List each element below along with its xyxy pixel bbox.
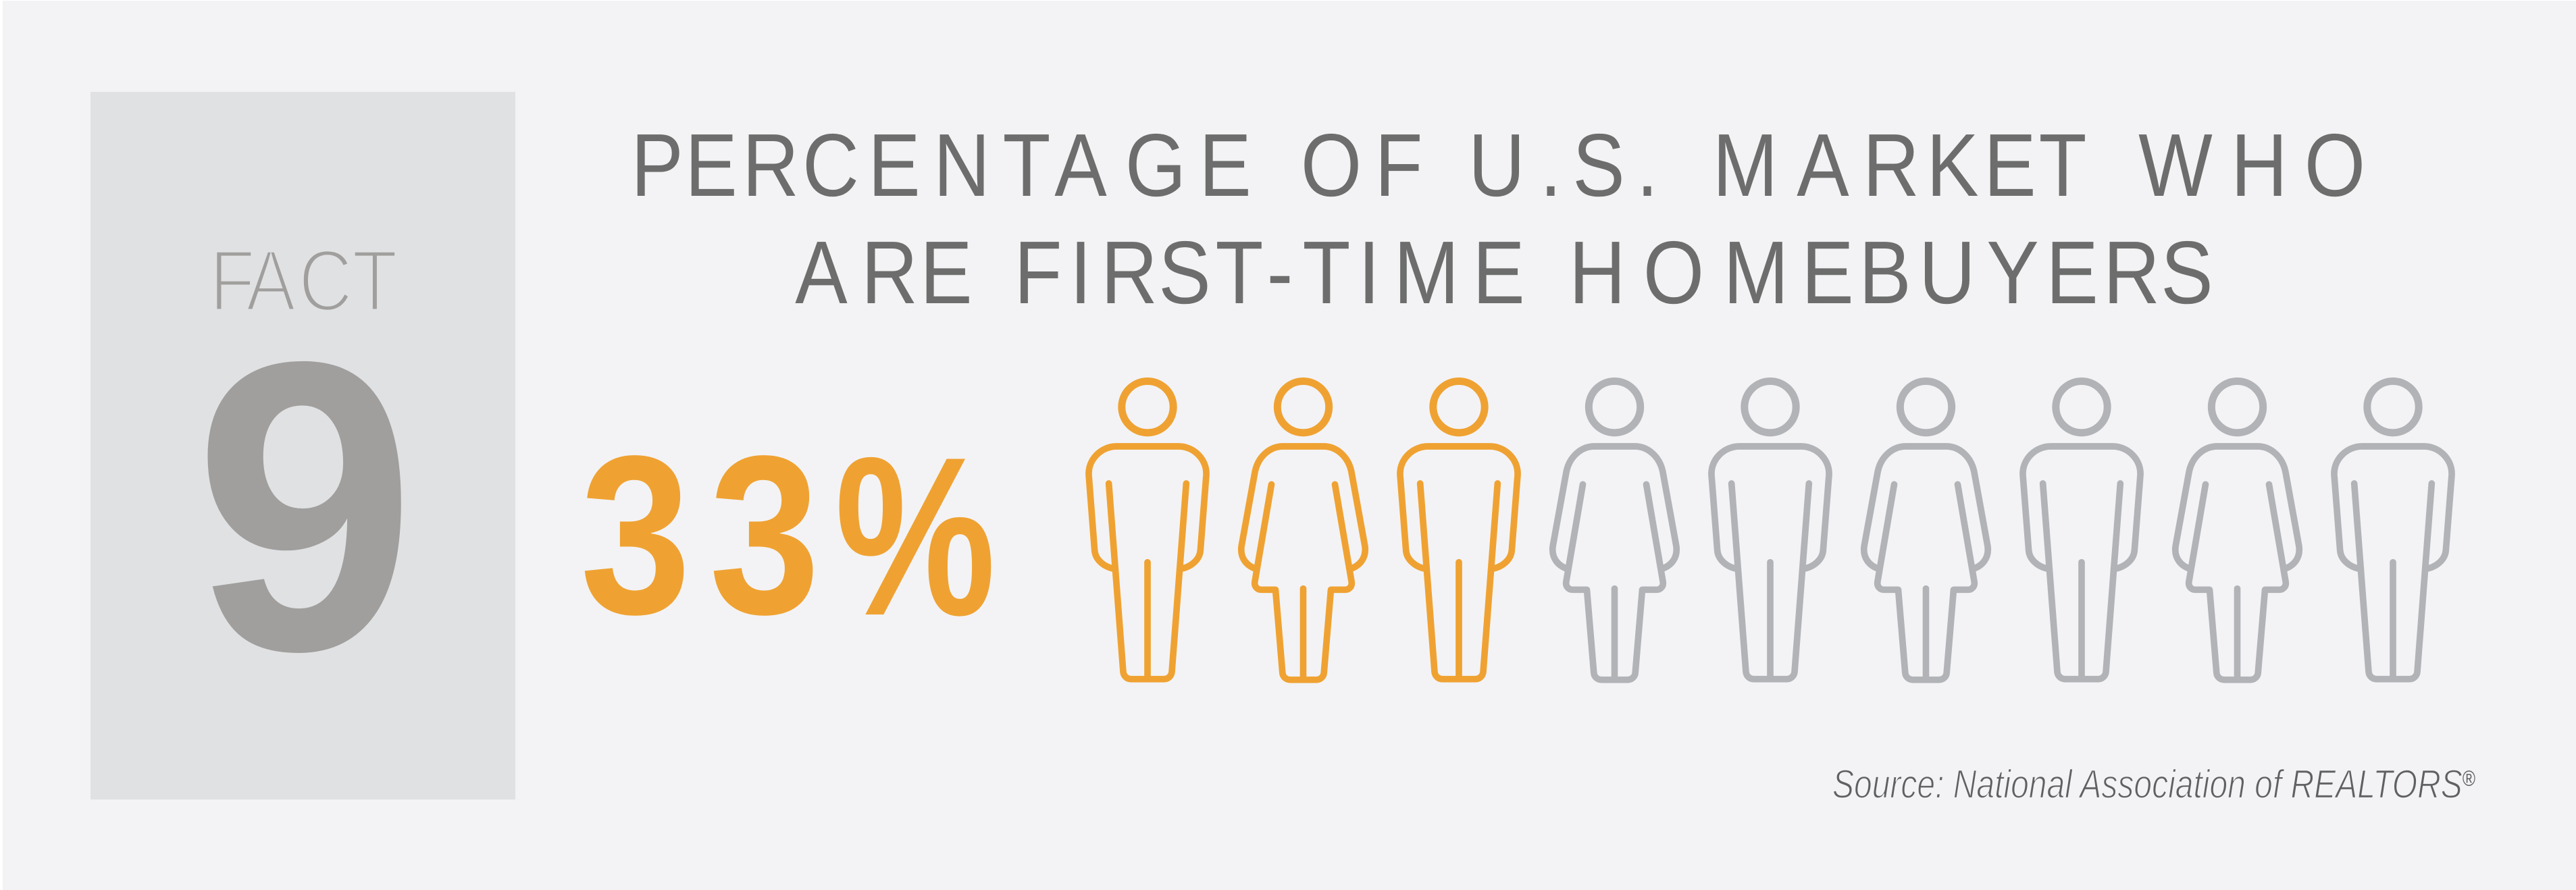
icon: man, grey <box>1711 381 1829 679</box>
statistic: 33%: % <box>835 410 996 663</box>
source note: ® <box>2463 766 2475 790</box>
icon: man, grey <box>2023 381 2140 679</box>
number: 9: 9 <box>194 276 416 737</box>
panel: fact number <box>91 92 515 800</box>
title: PERCENTAGE OF U.S. MARKET WHO <box>631 115 2365 215</box>
pictogram: nine people, three highlighted <box>1089 381 2452 680</box>
icon: woman, grey <box>1864 381 1988 680</box>
label: FACT: FACT <box>209 232 398 330</box>
title <box>631 115 2365 323</box>
statistic: 33%: 33 <box>580 408 820 661</box>
icon: man, highlighted <box>1089 381 1206 679</box>
icon: man, grey <box>2334 381 2452 679</box>
title: ARE FIRST-TIME HOMEBUYERS <box>795 223 2213 323</box>
icon: woman, grey <box>1553 381 1676 680</box>
icon: woman, grey <box>2175 381 2299 680</box>
icon: man, highlighted <box>1400 381 1518 679</box>
statistic: 33% <box>580 408 996 663</box>
icon: woman, highlighted <box>1241 381 1365 680</box>
